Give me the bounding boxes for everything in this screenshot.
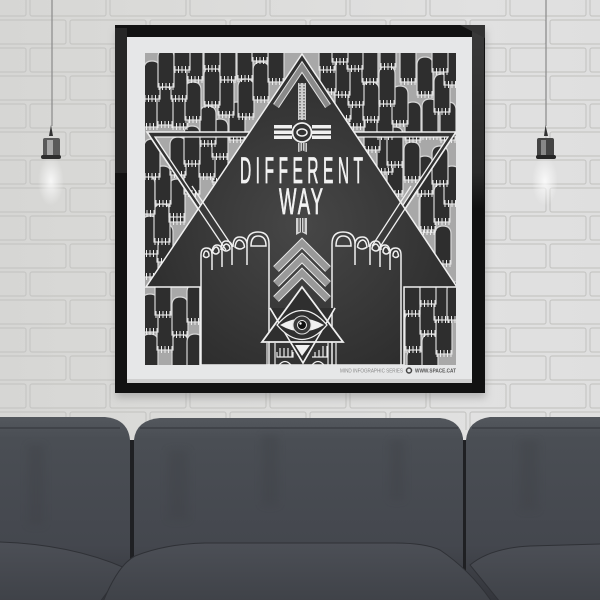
footer credits: WWW.SPACE.CAT	[415, 368, 457, 374]
large triangle	[146, 54, 457, 365]
icon: eye	[277, 310, 327, 340]
left seat cushion	[0, 542, 125, 600]
right big foot	[332, 232, 401, 365]
pendant lamp: right	[532, 0, 558, 206]
cushion piping	[0, 427, 600, 429]
triangle double lines crossing	[185, 186, 418, 250]
frame shadow	[116, 30, 486, 398]
cushion wrinkles	[28, 435, 538, 525]
sun symbol	[274, 123, 331, 152]
left big foot	[201, 232, 269, 365]
icon: logo	[406, 368, 412, 373]
small feet at base	[267, 343, 336, 365]
pendant lamp: left	[38, 0, 64, 206]
title: DIFFERENT	[240, 150, 363, 192]
left back cushion	[0, 417, 130, 600]
top arrow chevron	[276, 67, 328, 120]
footer credits	[340, 368, 457, 374]
poster artwork	[145, 53, 456, 365]
sofa	[0, 417, 600, 600]
centre seat cushion	[103, 543, 492, 600]
chevrons	[276, 243, 328, 299]
footer credits: MIND INFOGRAPHIC SERIES	[340, 368, 403, 374]
title: WAY	[279, 182, 323, 223]
arrow tail	[296, 218, 307, 235]
right seat cushion	[470, 544, 600, 600]
picture frame	[115, 25, 485, 393]
title	[241, 157, 363, 214]
eye triangles	[262, 287, 343, 363]
centre back cushion	[134, 418, 463, 600]
inverted triangle band	[146, 131, 456, 209]
right back cushion	[466, 417, 600, 600]
foot pattern	[145, 53, 456, 365]
